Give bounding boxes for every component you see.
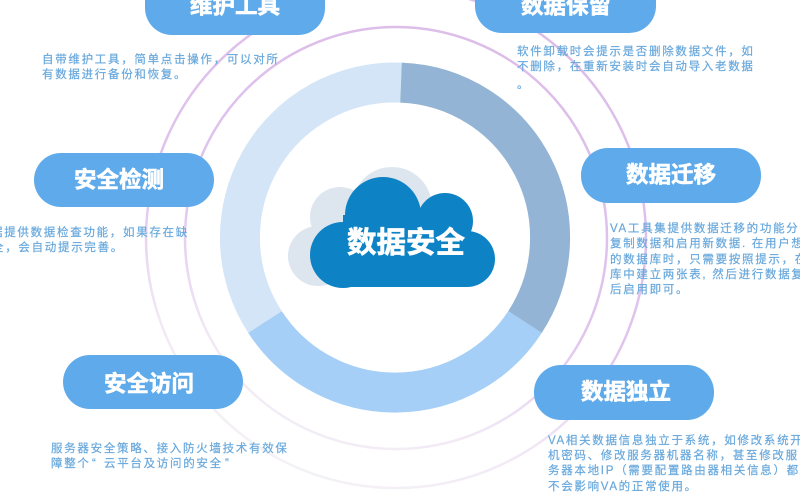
text: 安全访问 description: 障整个 — [51, 456, 91, 470]
text: 数据独立 description: VA相关数据信息独立于系统，如修改系统开 — [548, 435, 800, 447]
item: 数据保留 — [475, 0, 656, 33]
text: 安全访问 description: 服务器安全策略、接入防火墙技术有效保 — [51, 443, 289, 455]
item: 安全检测: 安全检测 — [74, 166, 164, 192]
text: 数据迁移 description: 复制数据和启用新数据. 在用户想 — [610, 236, 800, 250]
item: 数据独立 — [534, 365, 714, 420]
item: 数据迁移 — [581, 148, 761, 203]
pink orbit rings — [146, 0, 646, 488]
text: 数据保留 description: 不删除，在重新安装时会自动导入老数据 — [517, 59, 755, 73]
item: 数据独立: 数据独立 — [581, 378, 671, 404]
icon: cloud — [288, 167, 495, 288]
text: 数据独立 description: 机密码、修改服务器机器名称，甚至修改服 — [548, 448, 799, 462]
donut segment: sky blue bottom — [265, 322, 525, 393]
item: 安全检测 — [34, 153, 214, 207]
text: 维护工具 description: 自带维护工具，简单点击操作，可以对所 — [42, 54, 280, 66]
text: 数据迁移 description: 库中建立两张表, 然后进行数据复 — [610, 267, 800, 281]
cloud title: 数据安全 — [347, 226, 465, 260]
item: 维护工具 — [145, 0, 325, 35]
text: 安全访问 description: “ — [92, 458, 98, 470]
text: 维护工具 description: 有数据进行备份和恢复。 — [42, 67, 187, 81]
text: 数据独立 description: 务器本地IP（需要配置路由器相关信息）都 — [548, 463, 800, 477]
item: 数据迁移: 数据迁移 — [626, 162, 716, 188]
text: 安全访问 description: 云平台及访问的安全 — [104, 456, 223, 470]
back cloud — [288, 167, 432, 286]
donut segment: light left — [240, 82, 401, 322]
text: 安全访问 description: ” — [225, 458, 231, 470]
text: 数据迁移 description: 后启用即可。 — [610, 283, 689, 296]
front cloud — [310, 177, 495, 288]
item: 安全访问: 安全访问 — [104, 372, 194, 396]
text: 数据迁移 description: VA工具集提供数据迁移的功能分 — [610, 223, 800, 235]
item: 安全访问 — [63, 355, 243, 409]
text: 数据保留 description: 软件卸载时会提示是否删除数据文件，如 — [517, 46, 755, 58]
donut segment: slate right — [401, 83, 550, 322]
donut ring — [240, 82, 550, 393]
text: 数据保留 description: 。 — [517, 79, 530, 91]
